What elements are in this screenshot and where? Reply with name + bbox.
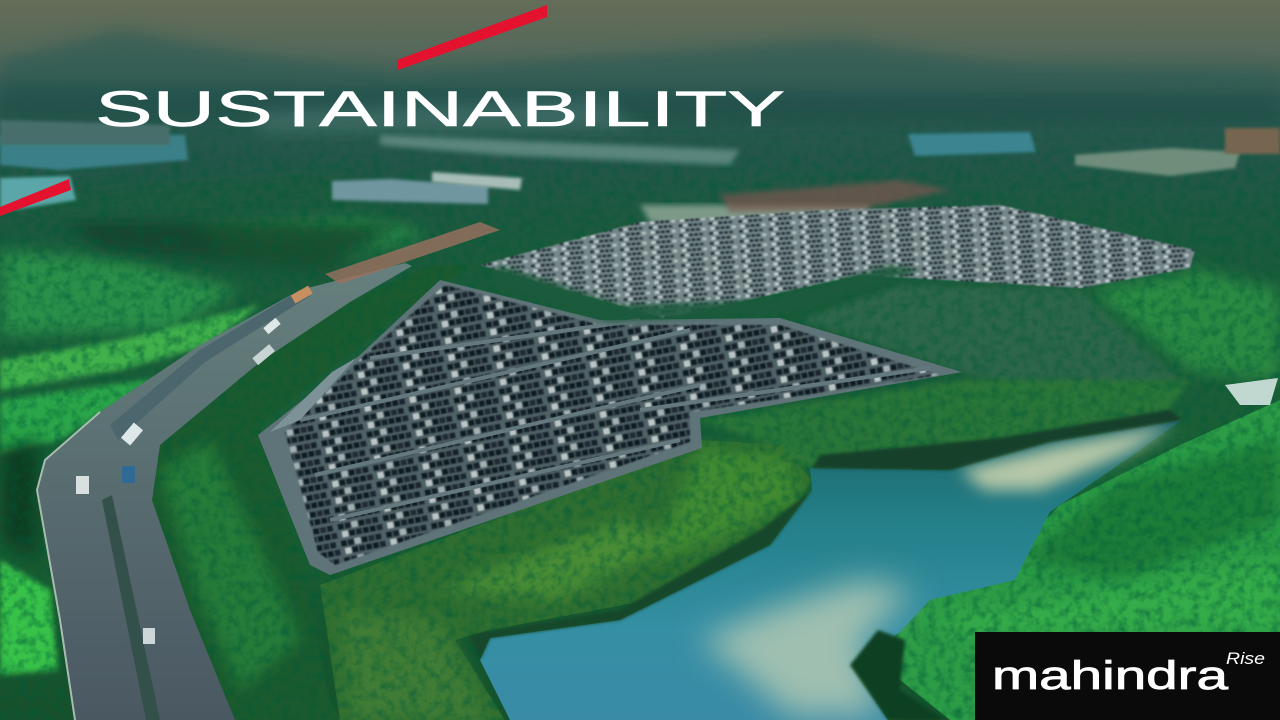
red accent slash top [397,5,547,70]
logo panel [975,632,1280,720]
wetland right of lot [700,270,1280,470]
parking lot with rows of cars [258,280,962,575]
upper car lot [480,205,1195,318]
road-side vegetation strip [152,265,470,720]
trees between lots [490,265,920,322]
grassy bank below lot [320,440,812,720]
red accent slash left [0,179,71,216]
right forest [850,400,1280,720]
shoreline trees [470,410,1182,720]
distant factory buildings [0,100,1280,232]
title: SUSTAINABILITY [95,81,785,137]
distant hills [0,30,1280,125]
lake with reflected sky [480,378,1278,720]
tagline: Rise [1226,649,1265,668]
highway [37,222,500,720]
brand wordmark: mahindra [992,654,1229,698]
left green fields [0,175,430,675]
